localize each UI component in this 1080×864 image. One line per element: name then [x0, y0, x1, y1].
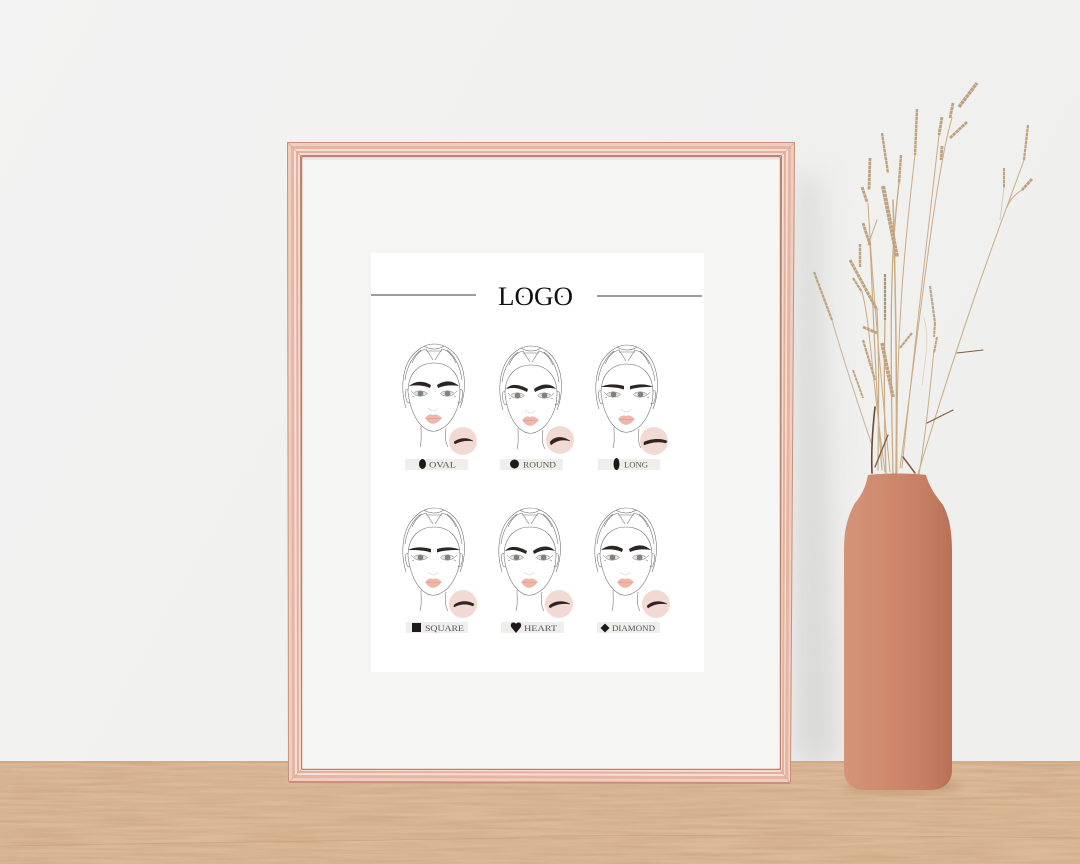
- brown grass leaves: [872, 350, 983, 473]
- wall shadow beside frame: [794, 175, 838, 764]
- picture frame: [287, 142, 795, 784]
- heading: logo: LOGO: [498, 282, 573, 311]
- mitre corner lines: [287, 142, 795, 784]
- white mat: [303, 158, 779, 768]
- frame bands: [287, 142, 795, 784]
- face chart: diamond: [595, 508, 670, 633]
- terracotta vase: [844, 474, 952, 790]
- face chart: square: SQUARE: [425, 624, 464, 633]
- face chart: round: [500, 346, 574, 470]
- face chart: oval: OVAL: [429, 460, 456, 470]
- dried grass stems: [832, 118, 1024, 474]
- face chart: long: [596, 345, 668, 470]
- grass seed heads: [814, 83, 1032, 398]
- vase shadow on table: [842, 782, 962, 792]
- face chart: heart: [499, 508, 573, 633]
- wooden table: [0, 761, 1080, 864]
- face chart: diamond: DIAMOND: [612, 624, 655, 633]
- face chart: long: LONG: [624, 460, 648, 470]
- face chart: heart: HEART: [524, 624, 557, 633]
- poster sheet: [371, 253, 704, 672]
- face chart: square: [403, 508, 477, 633]
- face chart: round: ROUND: [523, 460, 556, 470]
- face chart: oval: [403, 344, 477, 470]
